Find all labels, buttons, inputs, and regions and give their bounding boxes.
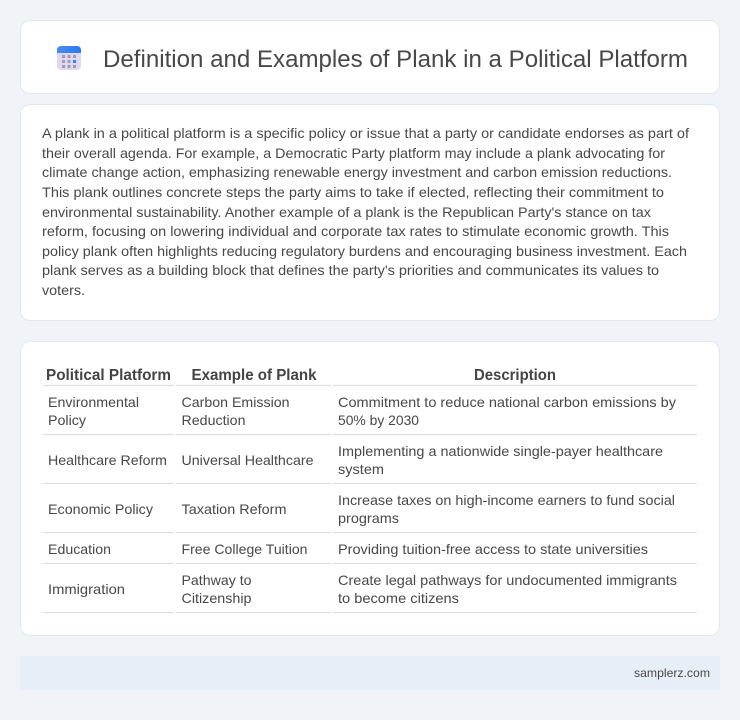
row: Environmental Policy: 50% by 2030 [338, 412, 419, 428]
row: Environmental Policy: Policy [48, 412, 86, 428]
row: Healthcare Reform: Implementing a nationwide single-payer healthcare [338, 443, 663, 459]
row: Immigration: Pathway to [182, 572, 252, 588]
text block: definition paragraph: their overall agenda. For example, a Democratic Party platform may include a plank advocating for [42, 145, 665, 161]
row: Healthcare Reform: system [338, 461, 384, 477]
row: Immigration [43, 572, 697, 612]
text block: definition paragraph: climate change action, emphasizing renewable energy investment and carbon emission reductions. [42, 164, 672, 180]
icon: calendar [57, 46, 81, 70]
text block: definition paragraph: reform, focusing on lowering individual and corporate tax rates to stimulate economic growth. This [42, 223, 669, 239]
panel: header card [20, 20, 720, 94]
text block: definition paragraph: voters. [42, 282, 85, 298]
row: Education: Free College Tuition [182, 541, 308, 557]
row: Immigration: Create legal pathways for undocumented immigrants [338, 572, 677, 588]
row: Economic Policy: Increase taxes on high-income earners to fund social [338, 492, 675, 508]
row: Environmental Policy: Carbon Emission [182, 394, 290, 410]
text block: definition paragraph [42, 125, 689, 298]
table [43, 367, 697, 612]
title: Definition and Examples of Plank in a Political Platform [103, 46, 688, 73]
row: Education: Providing tuition-free access to state universities [338, 541, 648, 557]
text block: definition paragraph: This plank outlines concrete steps the party aims to take if elected, reflecting their commitment to [42, 184, 664, 200]
row: Environmental Policy [43, 394, 697, 434]
row: Economic Policy [43, 492, 697, 532]
row: Education [43, 541, 697, 564]
row: Economic Policy: Economic Policy [48, 501, 153, 517]
row: Environmental Policy: Environmental [48, 394, 139, 410]
footer source text: samplerz.com [634, 666, 710, 680]
row: Education: Education [48, 541, 111, 557]
row: Economic Policy: programs [338, 510, 399, 526]
row: Healthcare Reform: Healthcare Reform [48, 452, 167, 468]
panel: table card [20, 341, 720, 636]
text block: definition paragraph: plank serves as a building block that defines the party's priorities and communicates its values to [42, 262, 659, 278]
text block: definition paragraph: A plank in a political platform is a specific policy or issue that a party or candidate endorses as part of [42, 125, 689, 141]
row: Immigration: to become citizens [338, 590, 459, 606]
table header row [43, 367, 697, 386]
row: Environmental Policy: Commitment to reduce national carbon emissions by [338, 394, 676, 410]
text block: definition paragraph: policy plank often highlights reducing regulatory burdens and encouraging business investment. Each [42, 243, 687, 259]
row: Immigration: Immigration [48, 581, 125, 597]
row: Healthcare Reform [43, 443, 697, 484]
row: Economic Policy: Taxation Reform [182, 501, 286, 517]
row: Immigration: Citizenship [182, 590, 252, 606]
text block: definition paragraph: environmental sustainability. Another example of a plank is the Republican Party's stance on tax [42, 204, 651, 220]
table header row: Example of Plank [192, 367, 317, 384]
table header row: Description [474, 367, 556, 384]
panel: paragraph card [20, 104, 720, 321]
panel: footer bar [20, 656, 720, 690]
table header row: Political Platform [46, 367, 171, 384]
row: Healthcare Reform: Universal Healthcare [182, 452, 314, 468]
row: Environmental Policy: Reduction [182, 412, 246, 428]
